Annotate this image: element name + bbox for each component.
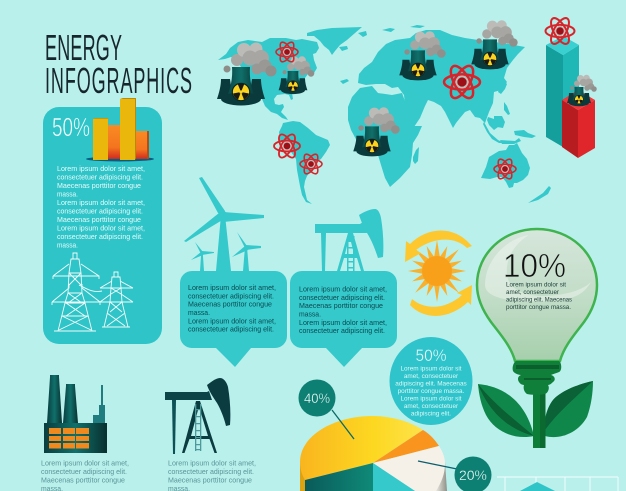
panel: wind energy callout [180, 271, 287, 367]
text block: panel copy: consectetuer adipiscing elit. [57, 232, 143, 241]
text block: wind copy: Maecenas porttitor congue [188, 300, 272, 309]
panel: oil callout [290, 271, 397, 367]
icon: atom australia [494, 157, 516, 181]
text block: panel copy: Lorem ipsum dolor sit amet, [57, 198, 145, 207]
icon: dark oil pump [165, 378, 230, 454]
text block: circle copy [395, 366, 467, 418]
text block: bulb copy: porttitor congue massa. [506, 304, 571, 311]
text block: bulb copy: Lorem ipsum dolor sit [506, 282, 566, 288]
icon: atom canada [276, 40, 298, 64]
title: INFOGRAPHICS [45, 61, 192, 102]
heading: 10 percent: 10% [503, 247, 566, 284]
text block: oil copy: massa. [299, 310, 321, 318]
title: ENERGY [45, 28, 122, 69]
bulb glass [477, 229, 597, 361]
icon: factory [44, 375, 107, 453]
icon: small wind turbine left [191, 242, 214, 271]
text block: wind copy: consectetuer adipiscing elit. [188, 291, 274, 300]
text block: panel copy: Maecenas porttitor congue [57, 215, 141, 224]
text block: panel copy: massa. [57, 190, 78, 198]
callout: 40 percent [298, 380, 354, 439]
icon: small wind turbine right [232, 232, 261, 271]
text block: panel copy [57, 164, 145, 250]
world map [218, 25, 551, 204]
text block: bulb copy: amet, consectetuer [506, 289, 560, 296]
text block: circle copy: adipiscing elit. Maecenas [395, 380, 467, 388]
icon: nuclear plant east america [279, 56, 314, 94]
text block: pump copy: Lorem ipsum dolor sit amet, [168, 458, 256, 468]
text block: pump copy: consectetuer adipiscing elit. [168, 467, 254, 476]
bulb collar [513, 361, 561, 395]
text block: circle copy: Lorem ipsum dolor sit [400, 366, 462, 372]
icon: small pylon [79, 272, 133, 327]
icon: sun with cycle arrows [405, 230, 472, 316]
text block: circle copy: Lorem ipsum dolor sit [400, 396, 462, 402]
text block: panel copy: consectetuer adipiscing elit. [57, 172, 143, 182]
heading: 50 percent: 50% [52, 112, 90, 142]
icon: nuclear plant north america [217, 42, 276, 106]
text block: factory copy: consectetuer adipiscing elit. [41, 467, 127, 476]
heading: 50 percent: 50% [416, 346, 446, 365]
text block: wind copy: massa. [188, 308, 210, 317]
text block: factory copy: Maecenas porttitor congue [41, 476, 125, 484]
icon: atom peru [274, 132, 300, 160]
bar chart [86, 98, 154, 162]
icon: green plant light bulb [477, 229, 597, 448]
isometric bar chart [546, 15, 597, 158]
text block: panel copy: Lorem ipsum dolor sit amet, [57, 224, 145, 232]
text block: panel copy: massa. [57, 240, 78, 250]
leaf right [544, 381, 593, 437]
icon: atom asia [444, 63, 480, 101]
arrow: top cycle [405, 230, 472, 262]
icon: large wind turbine [184, 177, 264, 271]
leaf left [478, 384, 534, 437]
bottom-right chart grid [497, 477, 618, 491]
text block: circle copy: amet, consectetuer [404, 403, 459, 410]
pie chart [300, 416, 447, 491]
text block: wind copy: Lorem ipsum dolor sit amet, [188, 283, 276, 292]
icon: teal oil pump [315, 209, 383, 271]
panel: left summary [43, 98, 162, 344]
text block: oil copy: consectetuer adipiscing elit. [299, 293, 385, 302]
text block: wind copy: consectetuer adipiscing elit. [188, 325, 274, 334]
text block: pump copy: Maecenas porttitor congue [168, 476, 252, 484]
text block: bulb copy: adipiscing elit. Maecenas [506, 296, 573, 304]
icon: nuclear plant asia [471, 20, 518, 69]
callout: 40 percent: 40% [304, 391, 330, 406]
text block: oil copy: Lorem ipsum dolor sit amet, [299, 284, 387, 294]
text block: panel copy: consectetuer adipiscing elit. [57, 206, 143, 216]
stem [533, 390, 546, 448]
callout: 20 percent [418, 456, 492, 491]
text block: wind copy [188, 283, 276, 334]
icon: atom brazil [300, 152, 322, 176]
text block: factory copy [41, 458, 129, 491]
text block: circle copy: amet, consectetuer [404, 373, 459, 380]
panel: 50 percent circle [390, 337, 472, 425]
text block: bulb copy [506, 282, 573, 311]
icon: nuclear plant africa [353, 107, 400, 156]
text block: pump copy [168, 458, 256, 491]
icon: atom on bar [546, 15, 574, 47]
text block: wind copy: Lorem ipsum dolor sit amet, [188, 316, 276, 325]
text block: circle copy: porttitor congue massa. [398, 388, 465, 395]
icon: plant on bar [567, 75, 597, 106]
arrow: bottom cycle [410, 285, 472, 316]
text block: oil copy: Maecenas porttitor congue [299, 301, 383, 310]
text block: oil copy: Lorem ipsum dolor sit amet, [299, 318, 387, 327]
title [45, 28, 192, 102]
icon: large pylon [52, 253, 100, 331]
icon: nuclear plant europe [399, 31, 446, 80]
callout: 20 percent: 20% [459, 468, 487, 483]
text block: panel copy: Lorem ipsum dolor sit amet, [57, 164, 145, 173]
text block: factory copy: Lorem ipsum dolor sit amet, [41, 458, 129, 468]
text block: panel copy: Maecenas porttitor congue [57, 181, 141, 190]
text block: circle copy: adipiscing elit. [411, 410, 451, 418]
text block: oil copy [299, 284, 387, 335]
text block: oil copy: consectetuer adipiscing elit. [299, 326, 385, 335]
